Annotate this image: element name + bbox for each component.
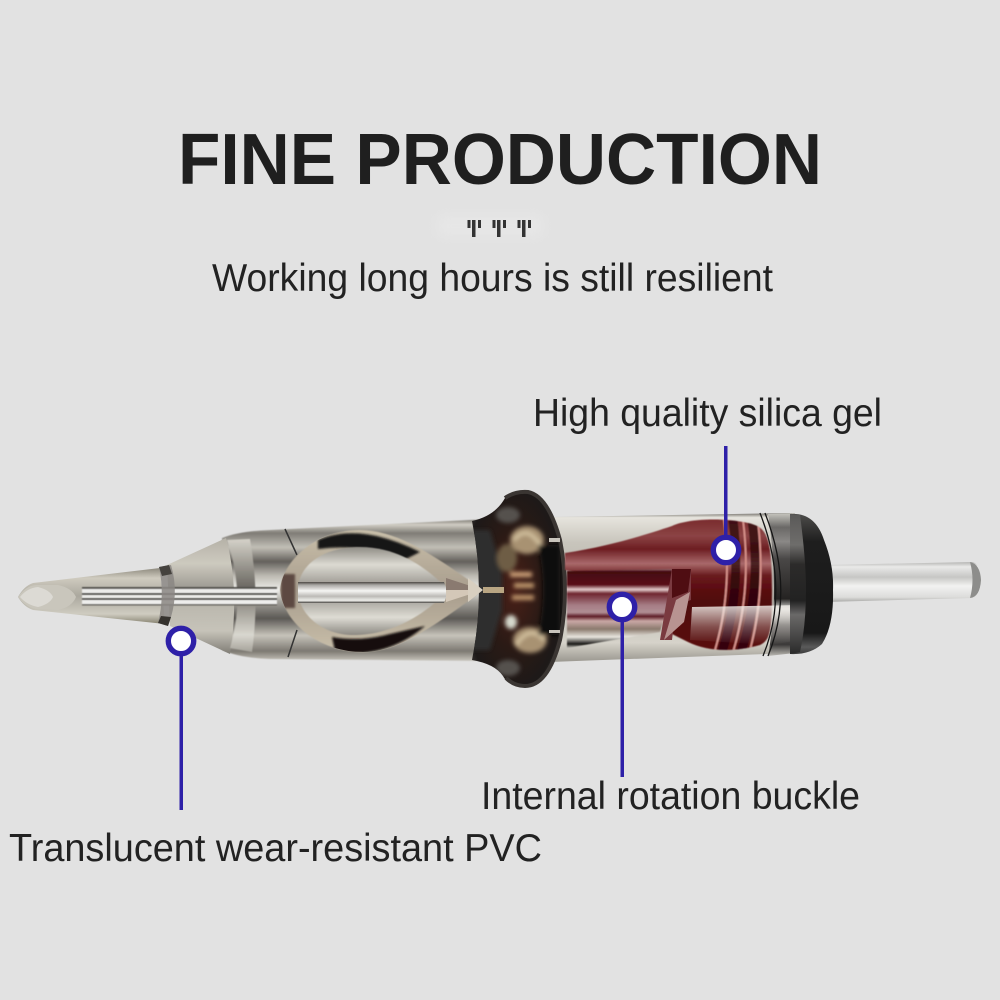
front barrel bbox=[222, 519, 490, 661]
inner rod bbox=[298, 582, 448, 603]
cone bbox=[167, 538, 234, 654]
callout: rotation buckle bbox=[481, 594, 860, 818]
barrel step bbox=[227, 539, 256, 652]
tip core bbox=[18, 585, 76, 610]
double seam lines bbox=[760, 513, 781, 656]
cap band bbox=[768, 513, 795, 656]
tip bbox=[18, 568, 165, 624]
needle shaft bbox=[825, 562, 981, 602]
callout: translucent PVC bbox=[9, 628, 542, 870]
callout: silica gel bbox=[533, 392, 882, 563]
rear clear barrel bbox=[550, 513, 792, 662]
callout: translucent PVC: Translucent wear-resistant PVC bbox=[9, 827, 542, 870]
inner needles bbox=[82, 587, 277, 606]
callout: rotation buckle: Internal rotation buckle bbox=[481, 775, 860, 818]
title: FINE PRODUCTION bbox=[178, 120, 822, 200]
light overlay bbox=[690, 605, 803, 645]
collar ring bbox=[158, 565, 175, 626]
internal rotation buckle bbox=[567, 569, 691, 648]
tattoo needle cartridge bbox=[18, 492, 981, 686]
flange bbox=[472, 492, 565, 686]
black end cap bbox=[790, 514, 833, 654]
teardrop window bbox=[280, 530, 483, 653]
red silica gel body bbox=[560, 515, 775, 655]
subtitle: Working long hours is still resilient bbox=[212, 257, 773, 300]
decorative mark row bbox=[438, 216, 542, 237]
tip pin over flange bbox=[468, 578, 504, 602]
callout: silica gel: High quality silica gel bbox=[533, 392, 882, 435]
